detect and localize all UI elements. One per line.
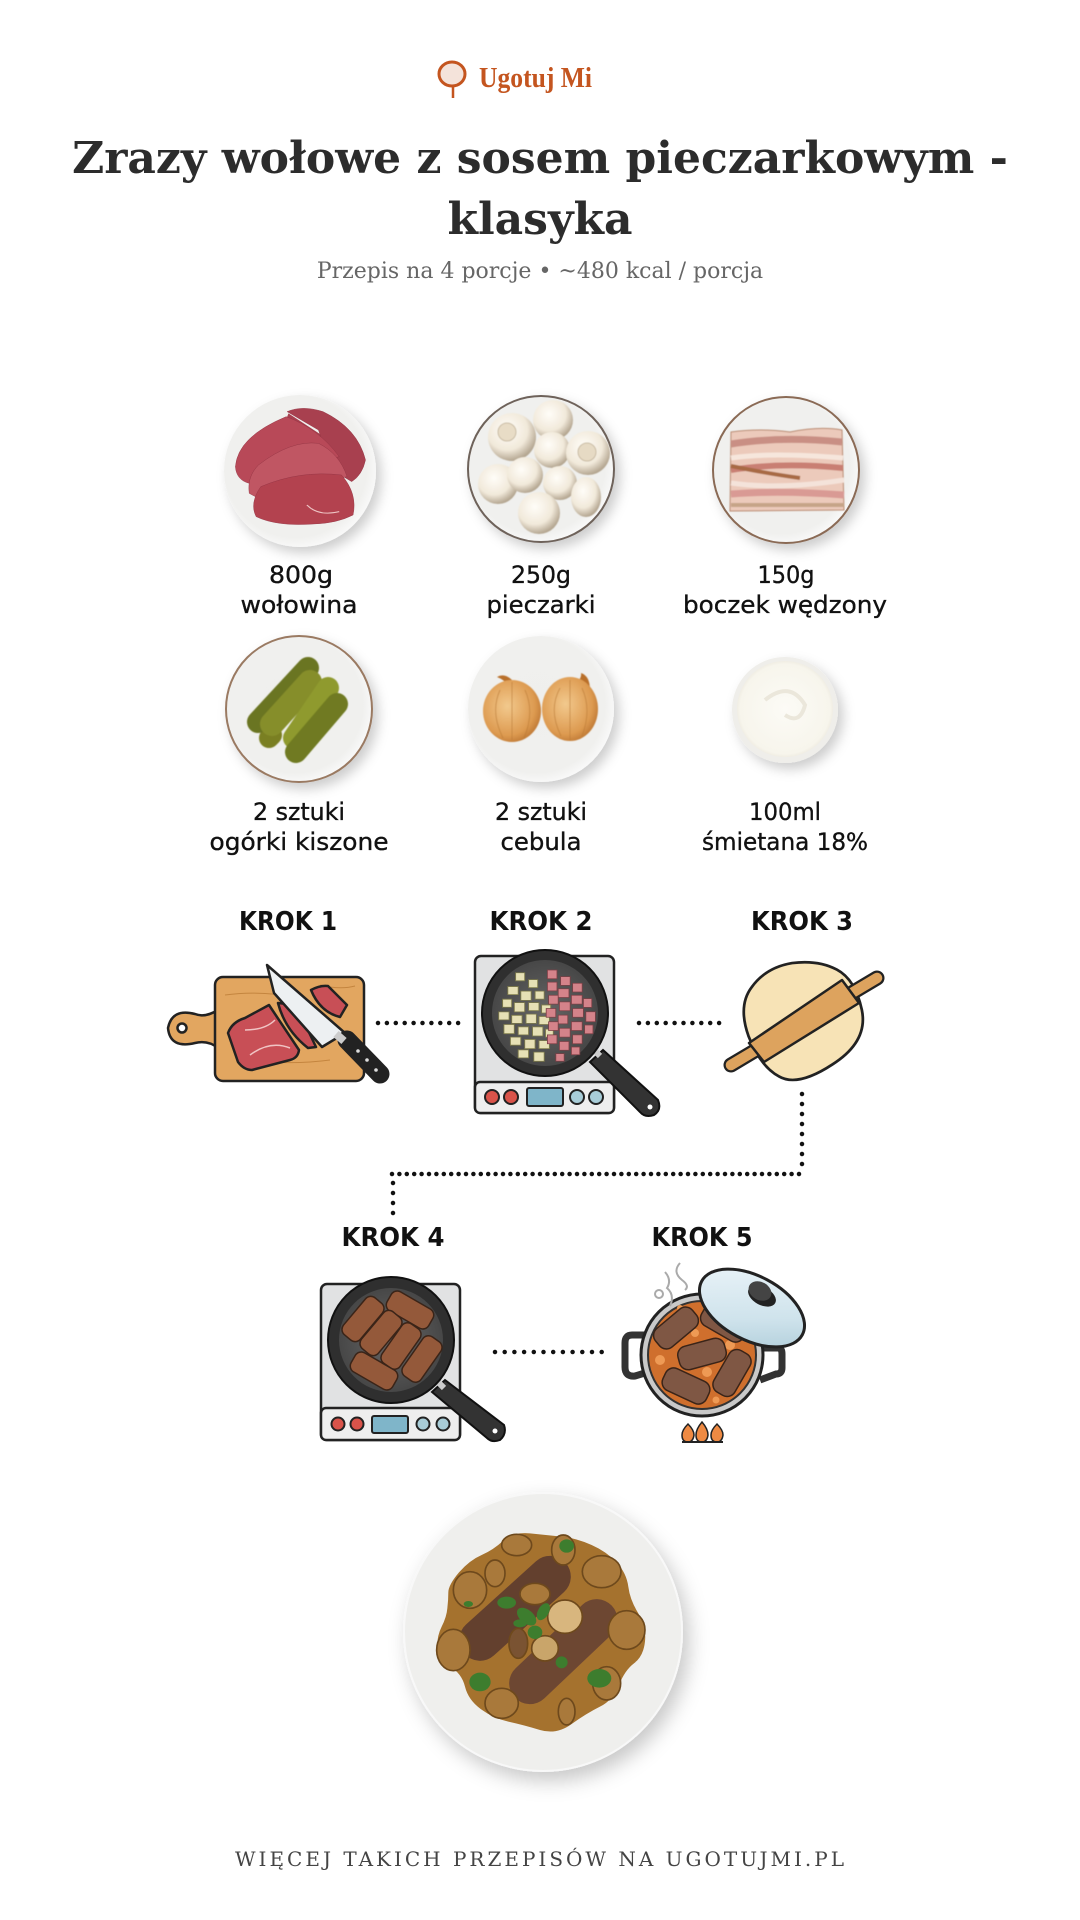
plate with bacon xyxy=(713,397,859,543)
ingredient: pickles xyxy=(210,636,388,856)
arrow: dotted connector 3 to 4 xyxy=(392,1094,802,1215)
step 3 heading: KROK 3 xyxy=(751,907,853,937)
logo wordmark: Ugotuj Mi xyxy=(479,63,592,94)
label: 2 sztuki xyxy=(495,798,587,826)
final dish: beef rolls with mushroom sauce xyxy=(404,1493,682,1771)
label: 100ml xyxy=(749,798,821,826)
label: 2 sztuki xyxy=(253,798,345,826)
label: ogórki kiszone xyxy=(210,828,388,856)
arrow: dotted 4 to 5 xyxy=(495,1350,603,1354)
label xyxy=(683,561,887,619)
icon: dough and rolling pin xyxy=(731,962,877,1080)
ingredient: sour cream xyxy=(702,657,868,856)
icon: pan with beef rolls on induction hob xyxy=(321,1277,505,1441)
label: 150g xyxy=(758,561,814,589)
bowl of cream xyxy=(732,657,838,763)
icon: spoon logo xyxy=(439,62,465,98)
step 1 heading: KROK 1 xyxy=(239,907,337,937)
label xyxy=(495,798,587,856)
step 4 heading: KROK 4 xyxy=(342,1223,444,1253)
ingredient: mushrooms xyxy=(468,396,614,619)
ingredient: beef xyxy=(224,395,376,619)
title: Zrazy wołowe z sosem pieczarkowym - xyxy=(72,133,1008,184)
label xyxy=(210,798,388,856)
label: śmietana 18% xyxy=(702,828,868,856)
label: 800g xyxy=(269,561,333,589)
label xyxy=(240,561,358,619)
footer: WIĘCEJ TAKICH PRZEPISÓW NA UGOTUJMI.PL xyxy=(235,1846,847,1871)
logo xyxy=(439,62,592,98)
panel: ingredients xyxy=(210,395,887,856)
label: boczek wędzony xyxy=(683,591,887,619)
icon: pan with onion and bacon on induction hob xyxy=(475,950,659,1116)
plate with onions xyxy=(468,636,614,782)
ingredient: smoked bacon xyxy=(683,397,887,619)
icon: cutting board with meat and knife xyxy=(168,965,380,1081)
icon: pot with rolls, lid and flames xyxy=(625,1253,817,1442)
arrow: dotted 2 to 3 xyxy=(639,1021,721,1025)
arrow: dotted 1 to 2 xyxy=(378,1021,460,1025)
step 2 heading: KROK 2 xyxy=(490,907,592,937)
plate with mushrooms xyxy=(468,396,614,542)
title: klasyka xyxy=(447,194,633,245)
plate with beef slices xyxy=(224,395,376,547)
plate with pickles xyxy=(226,636,372,782)
label: 250g xyxy=(511,561,571,589)
ingredient: onions xyxy=(468,636,614,856)
label: cebula xyxy=(500,828,582,856)
subtitle: Przepis na 4 porcje • ~480 kcal / porcja xyxy=(317,259,763,284)
title xyxy=(72,133,1008,245)
label xyxy=(486,561,596,619)
label xyxy=(702,798,868,856)
label: pieczarki xyxy=(486,591,596,619)
label: wołowina xyxy=(240,591,358,619)
step 5 heading: KROK 5 xyxy=(652,1223,752,1253)
panel: cooking steps xyxy=(168,907,877,1442)
